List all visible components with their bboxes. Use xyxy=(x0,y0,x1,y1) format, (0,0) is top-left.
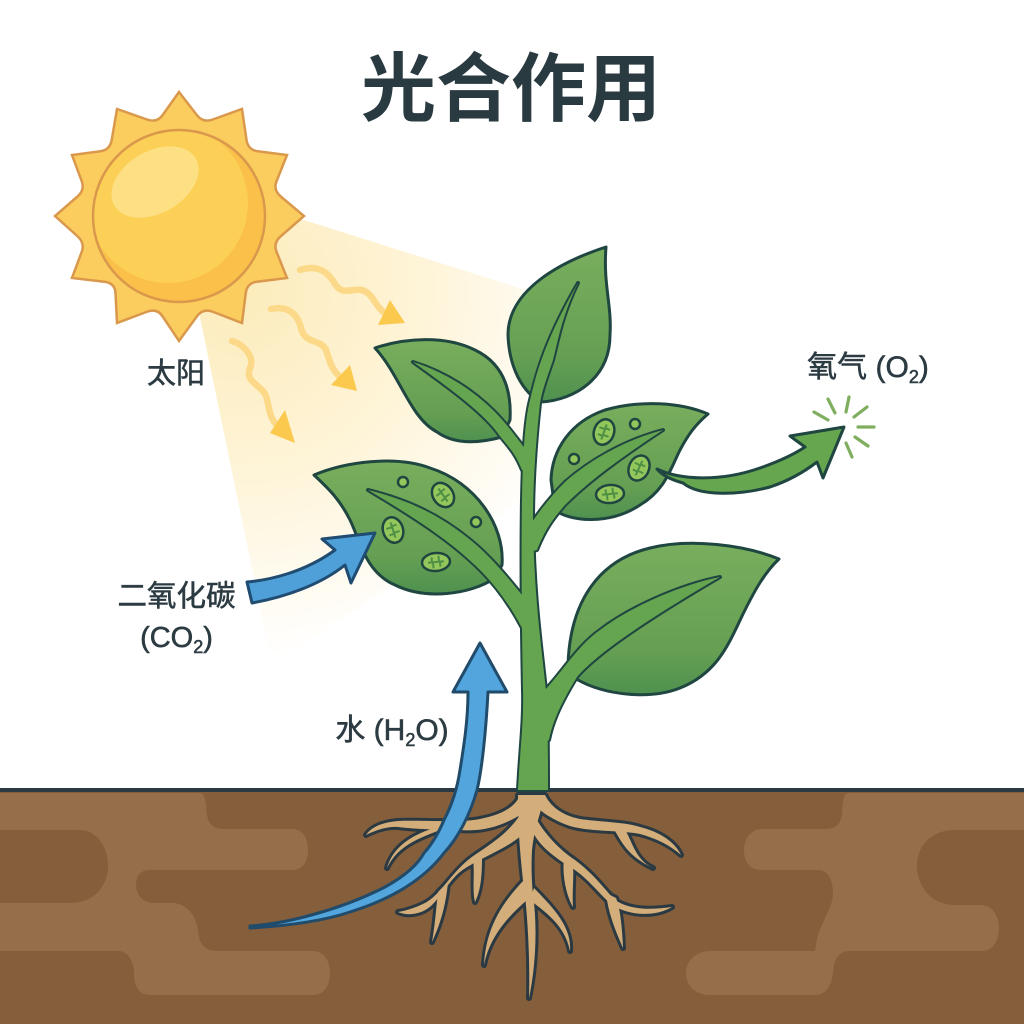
leaf: upper left xyxy=(375,340,510,442)
leaf: upper right xyxy=(551,404,708,520)
light ray 2 xyxy=(271,308,357,391)
label: carbon dioxide: 二氧化碳 xyxy=(117,580,236,613)
sunlight beam xyxy=(179,216,532,665)
light ray 1 xyxy=(300,268,405,325)
branch: lower right xyxy=(543,577,720,742)
stoma xyxy=(471,517,481,527)
chloroplast xyxy=(624,452,654,484)
ground line xyxy=(0,788,1024,792)
leaf: lower left xyxy=(314,461,502,594)
stem and branches xyxy=(368,283,720,790)
plant xyxy=(314,247,779,790)
label: water: 水 (H xyxy=(335,714,405,747)
label: water: O) xyxy=(415,714,449,747)
stoma xyxy=(630,419,640,429)
soil patch left xyxy=(0,793,330,995)
soil xyxy=(0,788,1024,1024)
stoma xyxy=(398,477,408,487)
root: upper right xyxy=(538,795,681,855)
chloroplast xyxy=(421,552,451,572)
branch: lower left xyxy=(368,490,526,630)
chloroplast xyxy=(379,515,407,545)
label: carbon dioxide: 2 xyxy=(193,637,203,657)
root: middle left xyxy=(398,815,522,914)
leaf: top xyxy=(508,247,610,402)
branch: upper right xyxy=(530,430,663,552)
stoma xyxy=(569,454,579,464)
root: upper left xyxy=(366,795,525,835)
label: carbon dioxide: (CO xyxy=(140,622,193,654)
soil patch right xyxy=(686,793,1024,995)
light ray 3 xyxy=(232,341,295,443)
sun body xyxy=(88,123,265,302)
rootlet: middle left 1 xyxy=(432,882,448,942)
oxygen arrow xyxy=(657,427,844,493)
leaf: lower right xyxy=(568,543,779,695)
label: carbon dioxide xyxy=(117,580,236,657)
label: water: 2 xyxy=(405,730,415,750)
stem xyxy=(518,283,578,790)
rootlet: middle right 1 xyxy=(606,893,623,948)
carbon dioxide arrow xyxy=(247,533,375,603)
icon: oxygen sparkle xyxy=(814,397,874,457)
chloroplast xyxy=(595,484,625,504)
taproot branch left xyxy=(484,880,527,965)
rootlet: middle right 2 xyxy=(563,858,573,907)
taproot branch right xyxy=(530,888,570,951)
root: middle right xyxy=(532,815,672,914)
label: oxygen: ) xyxy=(919,351,929,384)
rootlet: middle left 2 xyxy=(473,852,482,902)
water arrow xyxy=(250,643,507,928)
icon: sun xyxy=(55,92,304,341)
label: oxygen: 氧气 (O xyxy=(807,351,909,384)
light ray arrows xyxy=(232,268,405,443)
label: sun: 太阳 xyxy=(147,357,205,390)
roots xyxy=(366,795,681,998)
branch: upper left xyxy=(413,362,530,472)
chloroplast xyxy=(427,479,459,511)
chloroplasts xyxy=(379,416,654,572)
taproot xyxy=(518,795,545,998)
chloroplast xyxy=(590,416,618,448)
title: 光合作用 xyxy=(361,47,661,131)
rootlet: upper left xyxy=(387,825,445,868)
sun rays xyxy=(55,92,304,341)
label: carbon dioxide: ) xyxy=(203,622,213,654)
label: oxygen: 2 xyxy=(909,367,919,387)
rootlet: upper right xyxy=(612,826,653,868)
